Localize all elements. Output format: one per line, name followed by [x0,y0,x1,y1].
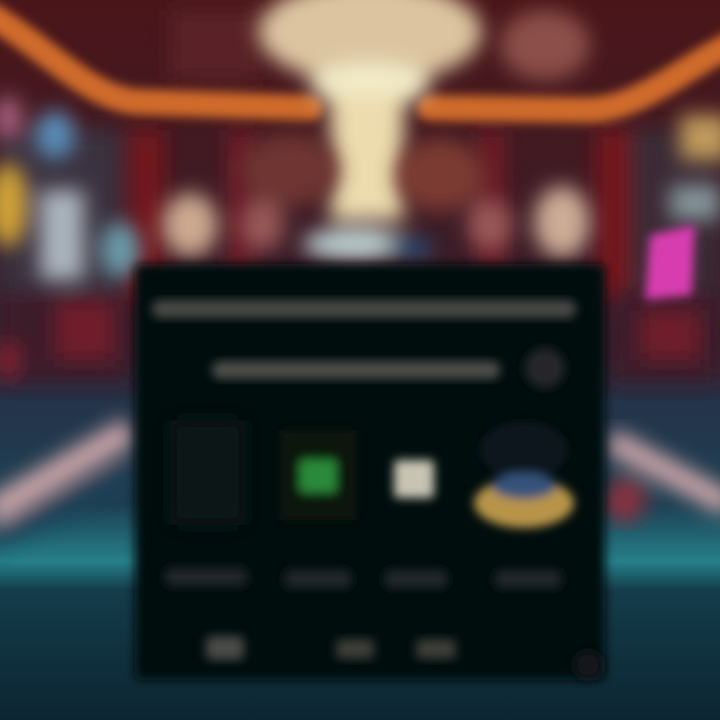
left striped walkway [0,430,130,540]
heading line 2 [212,361,500,379]
label: item 3 [385,570,447,588]
chandelier [258,0,482,260]
left shelves [0,96,340,380]
icon: white square [394,460,434,498]
ceiling and columns [0,10,720,380]
right striped walkway [610,440,720,510]
footer: button 3 [416,639,456,659]
icon: green square [280,430,356,520]
footer: corner mark [574,651,602,679]
label: item 4 [495,570,561,588]
orange garland [0,15,720,110]
footer: button 1 [206,636,244,660]
icon: heading badge [525,348,565,388]
icon: dark card [170,420,245,525]
heading line 1 [152,300,576,318]
pink neon sign [645,225,695,300]
panel: dark card [135,264,605,680]
icon: gold bowl [474,422,574,528]
right shelves [395,10,720,360]
label: item 2 [285,570,351,588]
footer: button 2 [336,639,374,659]
label: item 1 [165,568,247,586]
